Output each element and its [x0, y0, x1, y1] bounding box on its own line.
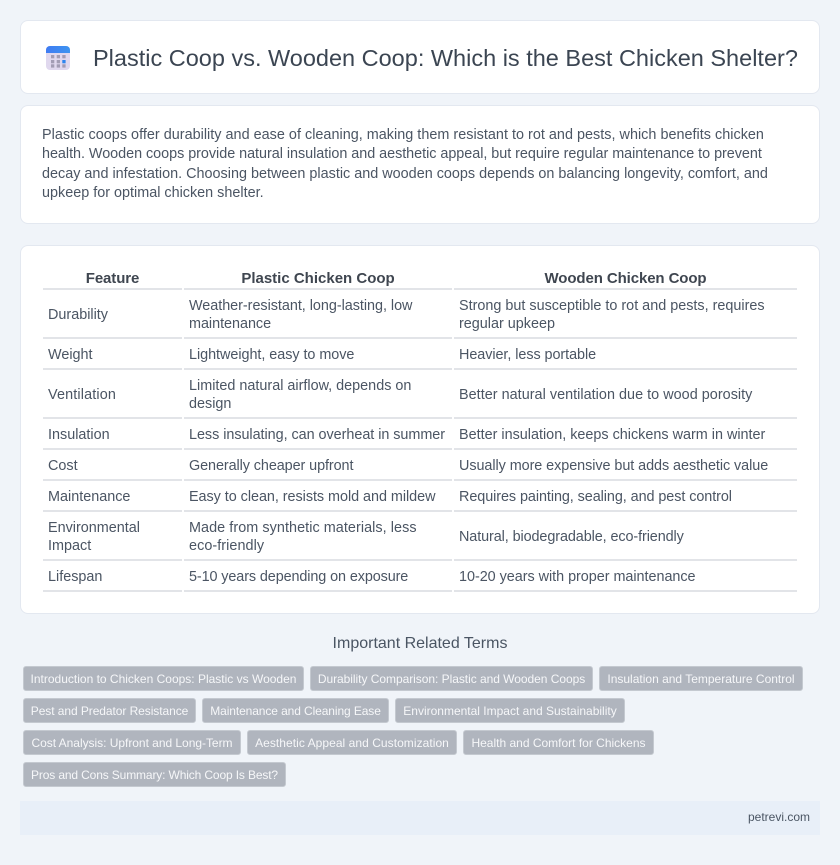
row: durability — [48, 298, 765, 332]
intro text: decay and infestation. Choosing between plastic and wooden coops depends on balancing longevity, comfort, and — [42, 166, 768, 182]
row: weight: Heavier, less portable — [459, 347, 596, 363]
intro text: upkeep for optimal chicken shelter. — [42, 185, 264, 201]
intro text: Plastic coops offer durability and ease of cleaning, making them resistant to rot and pests, which benefits chicken — [42, 127, 764, 143]
row: durability: Durability — [48, 307, 108, 323]
title: Plastic Coop vs. Wooden Coop: Which is the Best Chicken Shelter? — [93, 45, 798, 71]
table header — [86, 270, 706, 287]
row: cost: Generally cheaper upfront — [189, 458, 353, 474]
row: environmental impact: Impact — [48, 538, 91, 554]
related term chips: Pros and Cons Summary: Which Coop Is Best? — [31, 768, 278, 782]
row: maintenance: Maintenance — [48, 489, 130, 505]
row: ventilation: Better natural ventilation due to wood porosity — [459, 387, 752, 403]
table header: Wooden Chicken Coop — [544, 270, 706, 287]
row: cost: Cost — [48, 458, 78, 474]
related term chips: Maintenance and Cleaning Ease — [210, 704, 381, 718]
related terms heading: Important Related Terms — [333, 635, 507, 652]
row: insulation: Insulation — [48, 427, 110, 443]
icon: calendar — [46, 46, 70, 70]
related term chips: Insulation and Temperature Control — [607, 672, 795, 686]
row: lifespan: 10-20 years with proper maintenance — [459, 569, 696, 585]
table header: Plastic Chicken Coop — [241, 270, 395, 287]
intro text: health. Wooden coops provide natural insulation and aesthetic appeal, but require regular maintenance to prevent — [42, 146, 762, 162]
related term chips: Environmental Impact and Sustainability — [403, 704, 617, 718]
row: durability: Strong but susceptible to rot and pests, requires — [459, 298, 765, 314]
related term chips: Health and Comfort for Chickens — [471, 736, 646, 750]
row: cost: Usually more expensive but adds aesthetic value — [459, 458, 768, 474]
row: lifespan: Lifespan — [48, 569, 102, 585]
row: environmental impact: Made from synthetic materials, less — [189, 520, 417, 536]
row: insulation — [48, 427, 766, 443]
row: ventilation: Ventilation — [48, 387, 116, 403]
header card — [20, 20, 820, 94]
row: ventilation: Limited natural airflow, depends on — [189, 378, 411, 394]
table header: Feature — [86, 270, 139, 287]
row: lifespan: 5-10 years depending on exposure — [189, 569, 408, 585]
row: cost — [48, 458, 768, 474]
footer source: petrevi.com — [748, 810, 810, 824]
row: maintenance: Easy to clean, resists mold and mildew — [189, 489, 435, 505]
footer bar — [20, 801, 820, 835]
comparison table — [43, 270, 797, 592]
intro card — [20, 105, 820, 224]
related term chips: Pest and Predator Resistance — [31, 704, 188, 718]
row: durability: regular upkeep — [459, 316, 555, 332]
row: weight: Lightweight, easy to move — [189, 347, 354, 363]
intro text — [42, 127, 768, 201]
related term chips: Cost Analysis: Upfront and Long-Term — [31, 736, 233, 750]
row: ventilation: design — [189, 396, 231, 412]
row: environmental impact — [48, 520, 684, 554]
related term chips: Aesthetic Appeal and Customization — [255, 736, 449, 750]
row: environmental impact: Natural, biodegradable, eco-friendly — [459, 529, 684, 545]
row: durability: maintenance — [189, 316, 271, 332]
related term chips: Introduction to Chicken Coops: Plastic vs Wooden — [31, 672, 296, 686]
row: insulation: Less insulating, can overheat in summer — [189, 427, 445, 443]
row: environmental impact: eco-friendly — [189, 538, 264, 554]
row: maintenance — [48, 489, 732, 505]
row: weight — [48, 347, 596, 363]
row: ventilation — [48, 378, 752, 412]
row: weight: Weight — [48, 347, 93, 363]
table card — [20, 245, 820, 614]
row: environmental impact: Environmental — [48, 520, 140, 536]
row: durability: Weather-resistant, long-lasting, low — [189, 298, 412, 314]
row: maintenance: Requires painting, sealing, and pest control — [459, 489, 732, 505]
related term chips — [23, 666, 803, 787]
related term chips: Durability Comparison: Plastic and Wooden Coops — [318, 672, 585, 686]
row: insulation: Better insulation, keeps chickens warm in winter — [459, 427, 765, 443]
row: lifespan — [48, 569, 696, 585]
